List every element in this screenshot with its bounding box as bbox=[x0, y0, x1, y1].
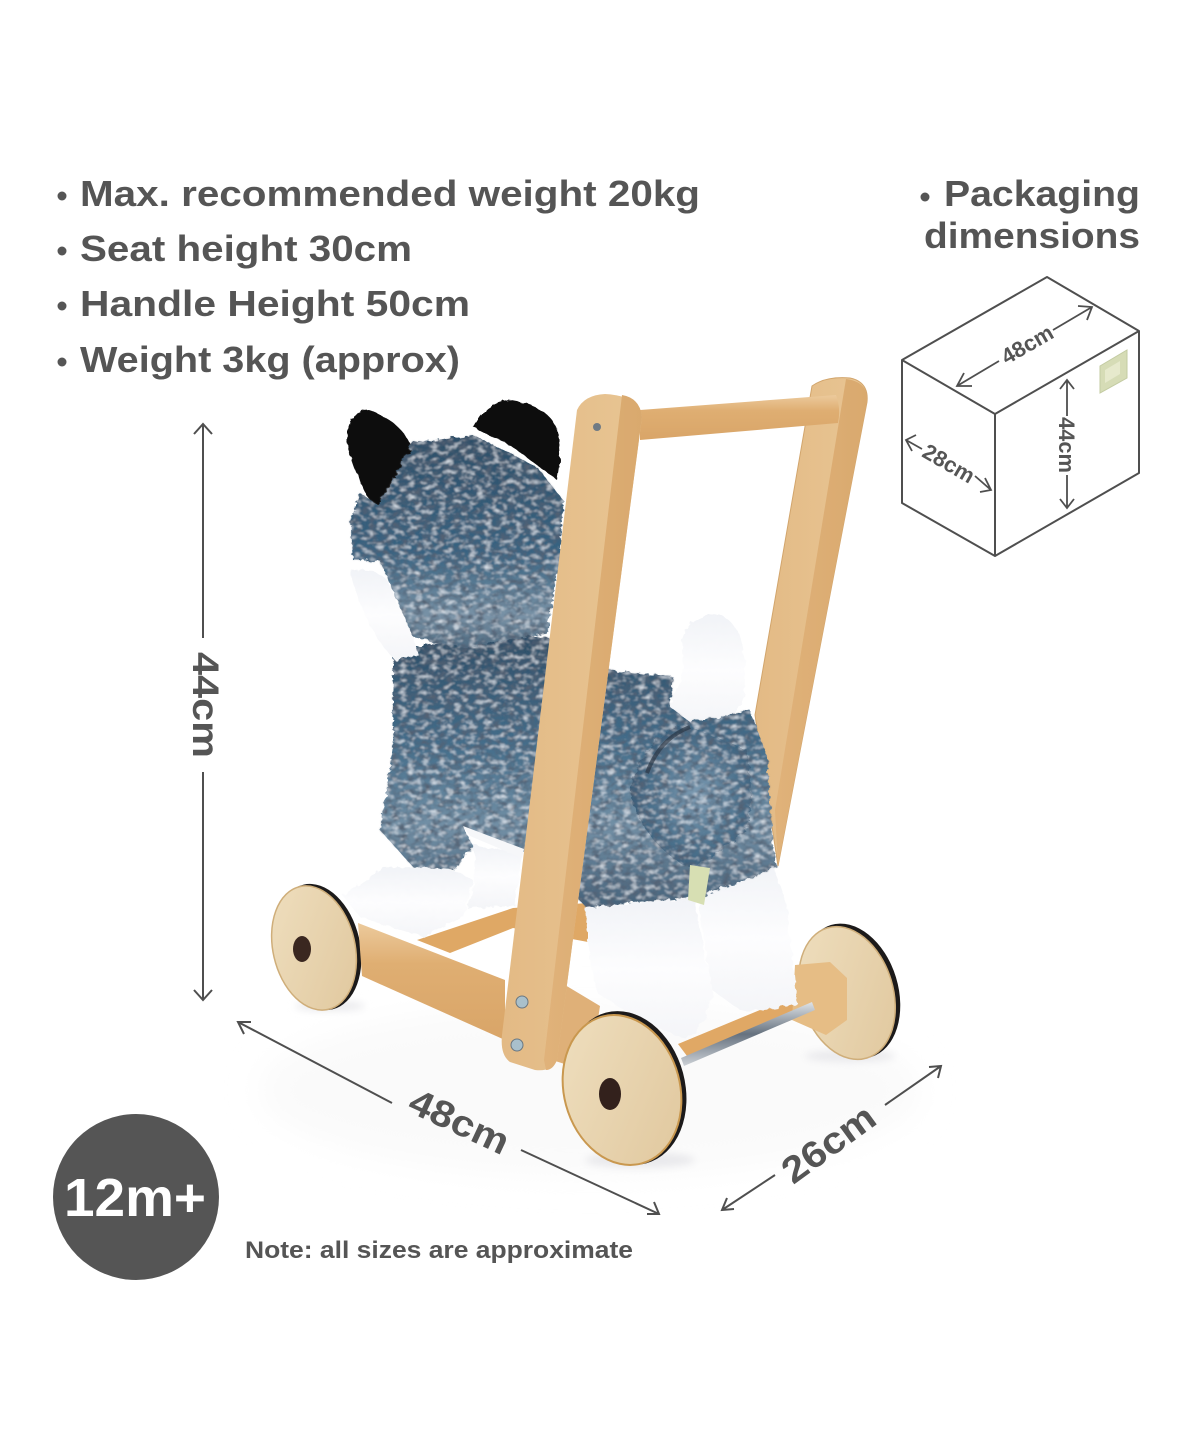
length arrow 48cm bbox=[238, 1022, 659, 1214]
height arrow 44cm bbox=[185, 424, 226, 1000]
front wheel bbox=[546, 997, 703, 1179]
packaging dimensions heading: dimensions bbox=[924, 215, 1140, 256]
dog: belly white bbox=[463, 826, 524, 858]
rear upright of handle bbox=[755, 378, 867, 866]
dog: haunch crease bbox=[647, 727, 690, 773]
packaging dimensions heading bbox=[920, 173, 1140, 256]
upright screws bbox=[511, 423, 601, 1051]
box label sticker bbox=[1100, 350, 1127, 393]
height arrow 44cm: 44cm bbox=[185, 652, 226, 758]
dog: body fur bbox=[380, 635, 777, 908]
dimension: box length 48cm bbox=[957, 306, 1092, 386]
box outline bbox=[902, 277, 1139, 556]
front upright of handle bbox=[502, 394, 642, 1070]
tag on dog bbox=[688, 865, 710, 905]
dog: white muzzle bbox=[350, 570, 418, 660]
dog: tail bbox=[668, 615, 745, 725]
packaging box diagram bbox=[902, 277, 1139, 556]
bullet: handle height: Handle Height 50cm bbox=[80, 283, 470, 324]
age badge 12m+ bbox=[53, 1114, 219, 1280]
specification list bbox=[58, 173, 700, 380]
length arrow 48cm: 48cm bbox=[403, 1081, 516, 1163]
packaging dimensions heading: Packaging bbox=[944, 173, 1140, 214]
wheel contact shadows bbox=[295, 1001, 895, 1168]
dimension: box height 44cm bbox=[1054, 380, 1079, 508]
bullet: product weight: Weight 3kg (approx) bbox=[80, 339, 460, 380]
dimension: box width 28cm bbox=[906, 435, 991, 492]
rear wheel bbox=[783, 911, 916, 1071]
bullet: seat height: Seat height 30cm bbox=[80, 228, 412, 269]
axle rail rear bbox=[678, 995, 812, 1060]
cross rail behind dog bbox=[417, 903, 588, 953]
steel axle bbox=[681, 1002, 815, 1066]
width arrow 26cm: 26cm bbox=[774, 1096, 884, 1192]
left wheel bbox=[260, 875, 373, 1019]
dog: head fur bbox=[350, 435, 563, 648]
floor shadow bbox=[260, 1005, 920, 1175]
dog: near rear leg bbox=[585, 898, 713, 1040]
dog: front paw bbox=[342, 867, 473, 937]
fork joint bbox=[552, 982, 600, 1072]
age badge 12m+: 12m+ bbox=[64, 1168, 206, 1228]
approximate sizes note: Note: all sizes are approximate bbox=[245, 1237, 633, 1264]
dog: haunch fur bbox=[630, 725, 751, 867]
axle block bbox=[792, 962, 847, 1035]
handle crossbar bbox=[640, 395, 839, 440]
product photo: husky baby walker bbox=[260, 378, 920, 1179]
side rail bbox=[358, 923, 505, 1040]
width arrow 26cm bbox=[722, 1066, 941, 1210]
dimension: box width 28cm: 28cm bbox=[918, 439, 979, 488]
dog: ears bbox=[346, 400, 560, 517]
dimension: box height 44cm: 44cm bbox=[1054, 417, 1079, 473]
dimension: box length 48cm: 48cm bbox=[997, 320, 1058, 369]
bullet: max weight: Max. recommended weight 20kg bbox=[80, 173, 700, 214]
dog: far legs bbox=[467, 845, 797, 1011]
